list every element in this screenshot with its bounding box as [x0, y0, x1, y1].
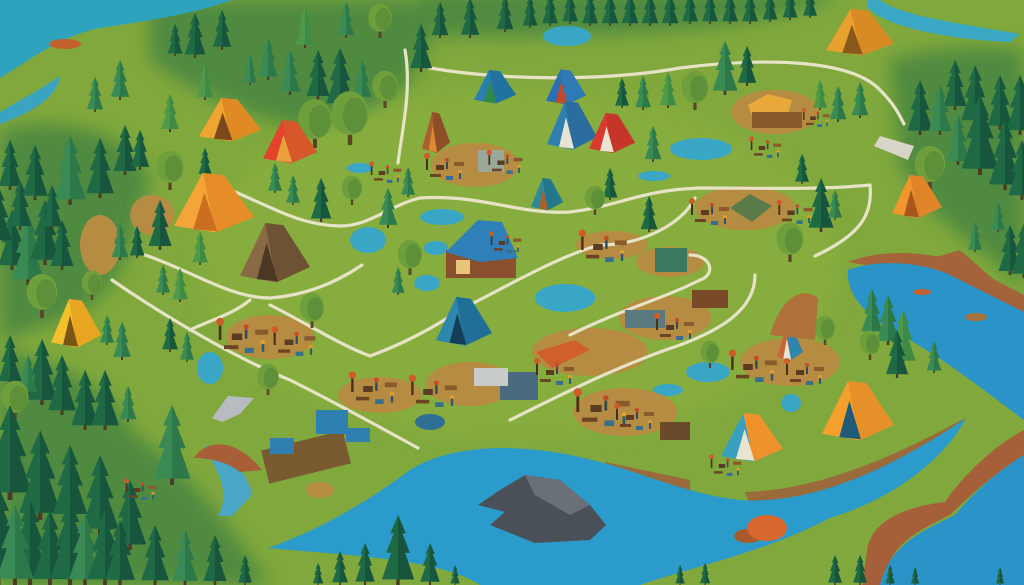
tent: large orange — [174, 173, 254, 232]
dirt clearings — [80, 90, 840, 498]
rock: grey and brown — [194, 250, 1000, 472]
rock: orange boulder — [734, 515, 787, 543]
water: top-left lake — [0, 0, 232, 78]
tent: orange top right — [826, 9, 894, 55]
bank: lower river edge — [605, 418, 965, 505]
bank: bottom right cliff — [862, 430, 1024, 585]
bottom right grass shore — [640, 520, 864, 585]
tent: orange lower right — [822, 381, 894, 440]
boats — [49, 39, 987, 430]
tent: teal hut — [531, 178, 563, 210]
camp props — [124, 108, 830, 500]
tent: yellow — [51, 299, 101, 348]
water: bottom right river — [880, 455, 1024, 585]
tent: orange right — [892, 175, 942, 218]
water: right river — [848, 263, 1024, 420]
tent: blue and green small — [474, 70, 516, 103]
forest: bottom centre and right — [313, 515, 1004, 585]
trail network — [112, 50, 904, 448]
lighter meadow clearing — [200, 90, 840, 440]
forest: right side — [795, 60, 1024, 278]
cabin: blue tent with white front — [547, 101, 597, 150]
forest: right of river bend — [815, 289, 941, 378]
forest: central scattered trees — [257, 41, 804, 395]
tent: teal centre — [436, 297, 492, 346]
ponds — [197, 26, 801, 412]
tent: red — [263, 120, 317, 163]
water: left stream — [0, 76, 60, 124]
tent: red cabin — [589, 113, 635, 153]
forest: top edge — [87, 0, 817, 148]
cabins and buildings — [261, 94, 914, 484]
water: bottom lake and river — [268, 418, 966, 585]
dark shoreline bank — [848, 253, 1024, 325]
water: stream at lower left — [205, 445, 252, 516]
tent: orange and teal — [721, 413, 783, 462]
forest: lower left — [0, 335, 252, 585]
cabin: blue roof — [446, 220, 518, 278]
forest: left side — [0, 125, 415, 362]
tent: orange upper left — [199, 98, 261, 141]
tent: small teal by river — [777, 328, 803, 360]
hut: wood — [422, 112, 450, 153]
tent: brown — [240, 223, 310, 282]
rock: boulder in lake — [478, 475, 606, 543]
water: top-right lake — [868, 0, 1020, 42]
tent: blue dome — [546, 70, 586, 105]
